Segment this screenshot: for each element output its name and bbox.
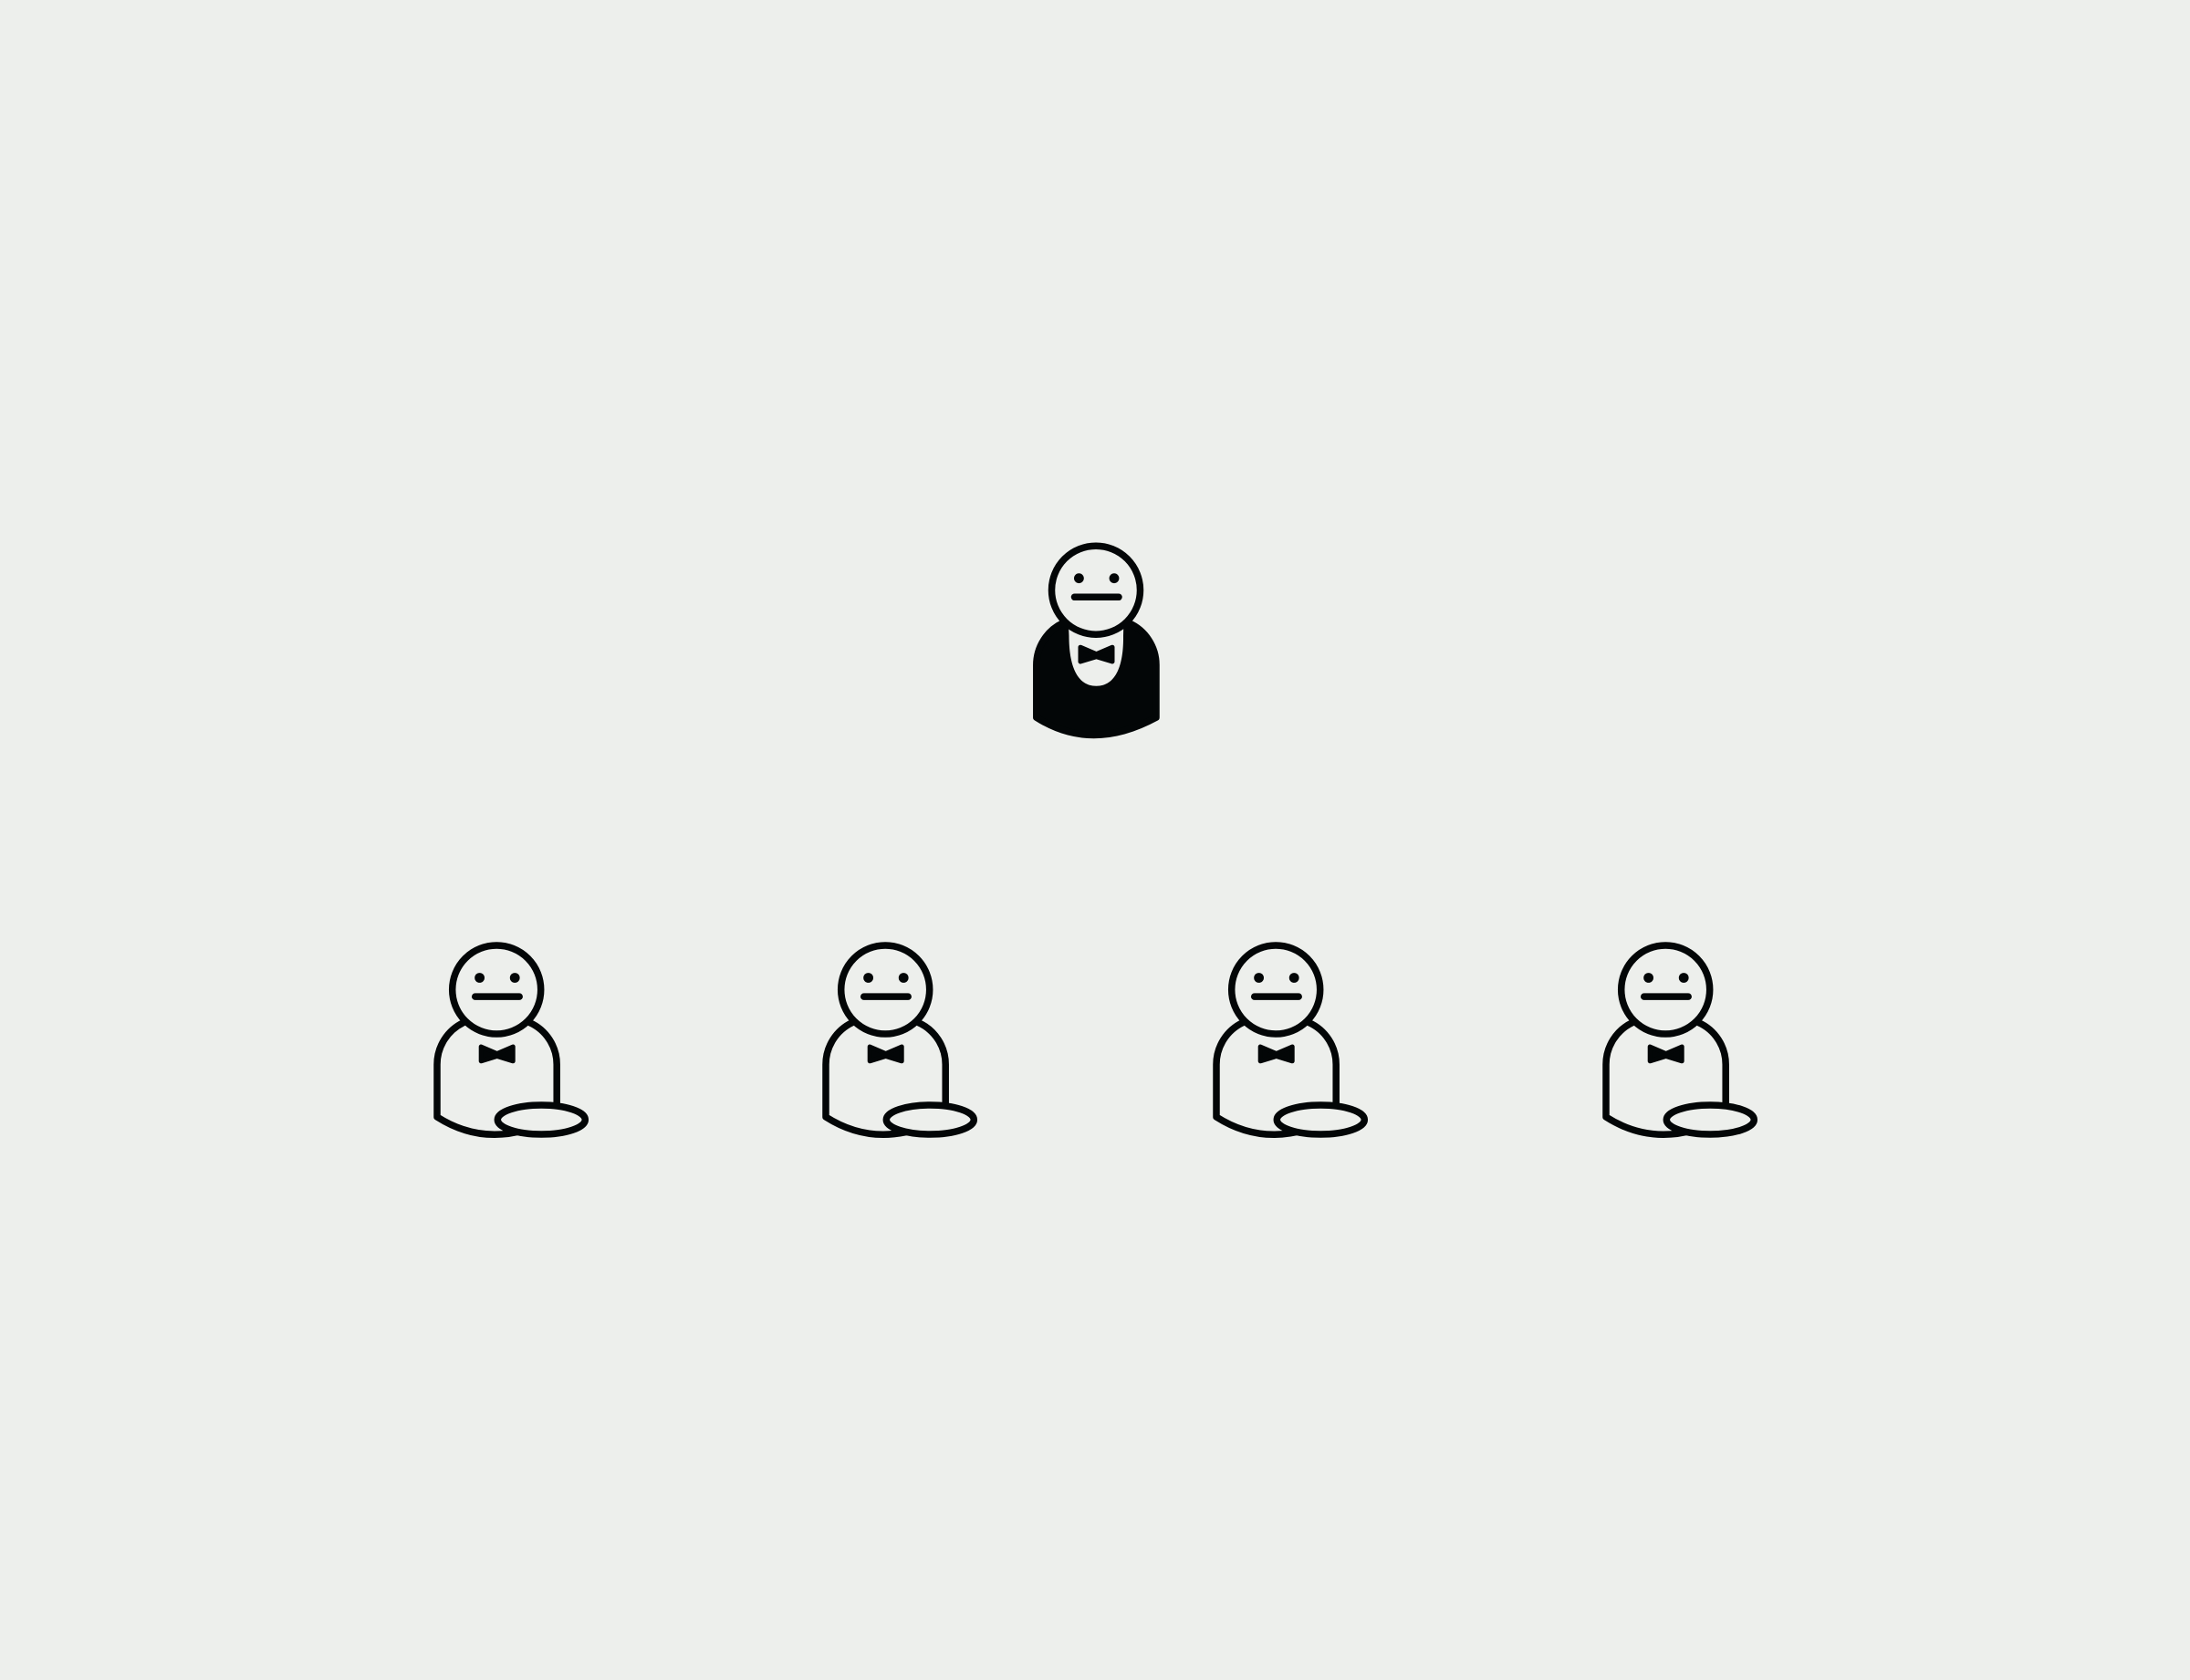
head circle bbox=[1051, 546, 1141, 634]
bow tie bbox=[1260, 1047, 1292, 1061]
mouth bbox=[1075, 594, 1119, 600]
white shirt bib bbox=[1069, 625, 1123, 686]
head circle bbox=[1232, 945, 1320, 1034]
head circle bbox=[453, 945, 541, 1034]
icon: waiter 2 with plate bbox=[826, 945, 974, 1134]
body outline bbox=[437, 1022, 557, 1134]
right eye bbox=[510, 973, 520, 983]
right eye bbox=[899, 973, 909, 983]
mouth bbox=[475, 993, 519, 1000]
head circle bbox=[1622, 945, 1710, 1034]
left eye bbox=[1074, 573, 1084, 583]
head circle bbox=[841, 945, 930, 1034]
left eye bbox=[863, 973, 873, 983]
mouth bbox=[864, 993, 908, 1000]
icon: waiter 3 with plate bbox=[1216, 945, 1364, 1134]
bow tie bbox=[1650, 1047, 1682, 1061]
body outline bbox=[1216, 1022, 1336, 1134]
icon: waiter 1 with plate bbox=[437, 945, 585, 1134]
right eye bbox=[1110, 573, 1119, 583]
mouth bbox=[1644, 993, 1688, 1000]
left eye bbox=[1254, 973, 1264, 983]
bow tie bbox=[870, 1047, 902, 1061]
black jacket bbox=[1037, 623, 1156, 735]
icon: waiter 4 with plate bbox=[1606, 945, 1754, 1134]
plate bbox=[1666, 1105, 1754, 1134]
bow tie bbox=[481, 1047, 513, 1061]
left eye bbox=[474, 973, 485, 983]
bow tie bbox=[1080, 647, 1112, 662]
right eye bbox=[1679, 973, 1689, 983]
body outline bbox=[826, 1022, 945, 1134]
mouth bbox=[1255, 993, 1298, 1000]
plate bbox=[886, 1105, 974, 1134]
body outline bbox=[1606, 1022, 1726, 1134]
left eye bbox=[1643, 973, 1653, 983]
icon: head waiter in black jacket bbox=[1037, 546, 1156, 735]
right eye bbox=[1289, 973, 1299, 983]
plate bbox=[1277, 1105, 1364, 1134]
plate bbox=[497, 1105, 585, 1134]
